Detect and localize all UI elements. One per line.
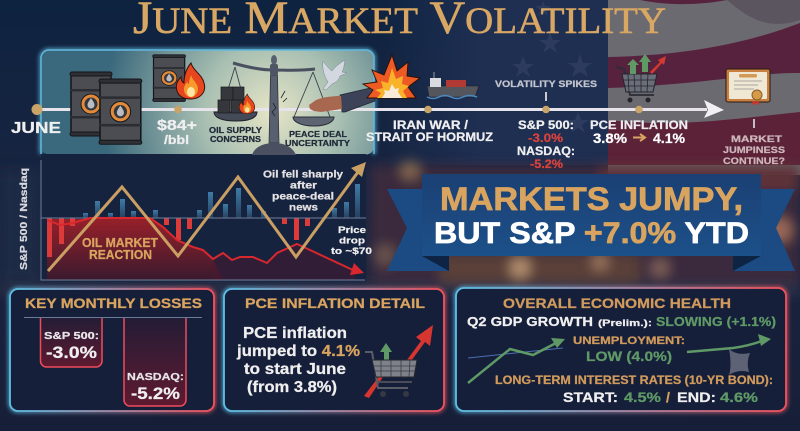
- heading: OVERALL ECONOMIC HEALTH: [503, 296, 731, 311]
- body text: PCE inflation: [243, 325, 347, 342]
- label: peace deal uncertainty: [285, 129, 350, 148]
- red bars: [47, 218, 310, 257]
- GDP row: [467, 315, 776, 329]
- body text: jumped to 4.1%: [236, 343, 360, 360]
- annotation: oil fell sharply: peace-deal: [272, 190, 334, 202]
- label: Iran war: STRAIT OF HORMUZ: [366, 130, 493, 144]
- body text: [236, 325, 360, 396]
- label: PCE inflation: 4.1%: [653, 131, 685, 146]
- label: oil market reaction: [82, 236, 158, 262]
- chart: market reaction: [41, 160, 366, 280]
- unemployment label: [573, 335, 685, 364]
- annotation: oil fell sharply: [263, 168, 343, 214]
- label: Iran war: IRAN WAR /: [393, 118, 469, 132]
- icon: certificate: [726, 69, 770, 105]
- interest rates: END:: [677, 389, 716, 405]
- interest rates: 4.5%: [624, 389, 662, 405]
- panel: overall economic health: [456, 288, 786, 411]
- annotation: price drop: to ~$70: [331, 246, 372, 257]
- label: market jumpiness: JUMPINESS: [723, 145, 785, 156]
- red area: [47, 219, 223, 280]
- bar: S&P 500: -3.0%: [46, 343, 97, 362]
- y axis label: S&P 500 / Nasdaq: [19, 168, 30, 270]
- bar: Nasdaq: [124, 318, 186, 406]
- annotation: oil fell sharply: after: [290, 180, 317, 192]
- label: volatility spikes: [495, 79, 597, 101]
- icon: suited hand: [309, 87, 375, 112]
- annotation: price drop: drop: [339, 236, 365, 246]
- panel: oil and peace events: [41, 50, 374, 154]
- blue bars: [83, 184, 360, 218]
- red price line: [47, 218, 355, 271]
- annotation: price drop: Price: [338, 225, 366, 236]
- label: volatility spikes: VOLATILITY SPIKES: [495, 79, 597, 90]
- label: peace deal uncertainty: UNCERTAINTY: [285, 138, 350, 148]
- gold zigzag: [48, 172, 358, 271]
- icon: cart with red arrow: [364, 325, 433, 398]
- volatility figures: S&P 500:: [518, 120, 574, 132]
- icon: balance scale: [214, 55, 334, 155]
- unemployment label: UNEMPLOYMENT:: [573, 335, 685, 347]
- sparkline: GDP: [468, 338, 565, 383]
- icon: oil barrels: [70, 72, 142, 144]
- body text: (from 3.8%): [247, 379, 337, 396]
- icon: burning barrel: [153, 55, 205, 101]
- price label: /bbl: [164, 133, 189, 147]
- chart panel: [41, 154, 366, 280]
- label: PCE inflation: 3.8%: [593, 131, 627, 146]
- label: oil supply concerns: CONCERNS: [210, 134, 261, 144]
- GDP row: (Prelim.):: [598, 318, 652, 329]
- label: June: JUNE: [11, 120, 61, 137]
- interest rates: START:: [563, 389, 618, 405]
- interest rates: /: [666, 389, 670, 405]
- volatility figures: -5.2%: [530, 159, 563, 171]
- label: oil market reaction: REACTION: [89, 248, 152, 262]
- price label: $84+: [157, 117, 197, 134]
- panel: PCE inflation detail: [224, 289, 444, 411]
- interest rates: [495, 375, 773, 405]
- icon: explosion: [363, 55, 420, 98]
- sparkline: unemployment: [687, 334, 771, 352]
- GDP row: SLOWING (+1.1%): [656, 315, 776, 329]
- bar: Nasdaq: NASDAQ:: [127, 371, 184, 383]
- label: oil supply concerns: [209, 125, 262, 144]
- axes: [41, 160, 366, 280]
- icon: sparkle: [729, 349, 750, 375]
- panel: key monthly losses: [10, 289, 214, 411]
- interest rates: 4.6%: [720, 389, 759, 405]
- GDP row: Q2 GDP GROWTH: [467, 315, 593, 329]
- label: PCE inflation: PCE INFLATION: [590, 118, 688, 132]
- bar: S&P 500: [40, 318, 102, 367]
- body text: to start June: [244, 361, 346, 378]
- heading: KEY MONTHLY LOSSES: [25, 296, 202, 311]
- label: Iran war: [366, 118, 493, 144]
- icon: shopping cart with arrows: [616, 54, 666, 102]
- label: oil supply concerns: OIL SUPPLY: [209, 125, 262, 135]
- banner headline: MARKETS JUMPY,: [440, 181, 743, 217]
- volatility figures: NASDAQ:: [517, 146, 575, 158]
- banner headline: BUT S&P +7.0% YTD: [434, 217, 749, 250]
- label: peace deal uncertainty: PEACE DEAL: [289, 129, 347, 139]
- icon: dove: [323, 60, 347, 90]
- label: market jumpiness: [723, 119, 785, 167]
- annotation: oil fell sharply: Oil fell sharply: [263, 168, 343, 180]
- label: oil market reaction: OIL MARKET: [82, 236, 158, 250]
- label: PCE inflation: [590, 118, 688, 146]
- interest rates: LONG-TERM INTEREST RATES (10-YR BOND):: [495, 375, 773, 387]
- banner headline: [434, 181, 749, 250]
- unemployment label: LOW (4.0%): [586, 349, 672, 364]
- bar: S&P 500: S&P 500:: [44, 330, 99, 342]
- price label: [157, 117, 197, 147]
- icon: cargo ship: [427, 72, 479, 98]
- volatility figures: -3.0%: [528, 133, 563, 145]
- volatility figures: [517, 120, 575, 171]
- label: market jumpiness: CONTINUE?: [723, 156, 785, 167]
- timeline: [32, 100, 724, 118]
- annotation: price drop: [331, 225, 372, 257]
- annotation: oil fell sharply: news: [289, 202, 318, 214]
- heading: PCE INFLATION DETAIL: [245, 296, 425, 311]
- bar: Nasdaq: -5.2%: [131, 384, 180, 403]
- banner: [387, 174, 795, 271]
- label: market jumpiness: MARKET: [731, 134, 782, 145]
